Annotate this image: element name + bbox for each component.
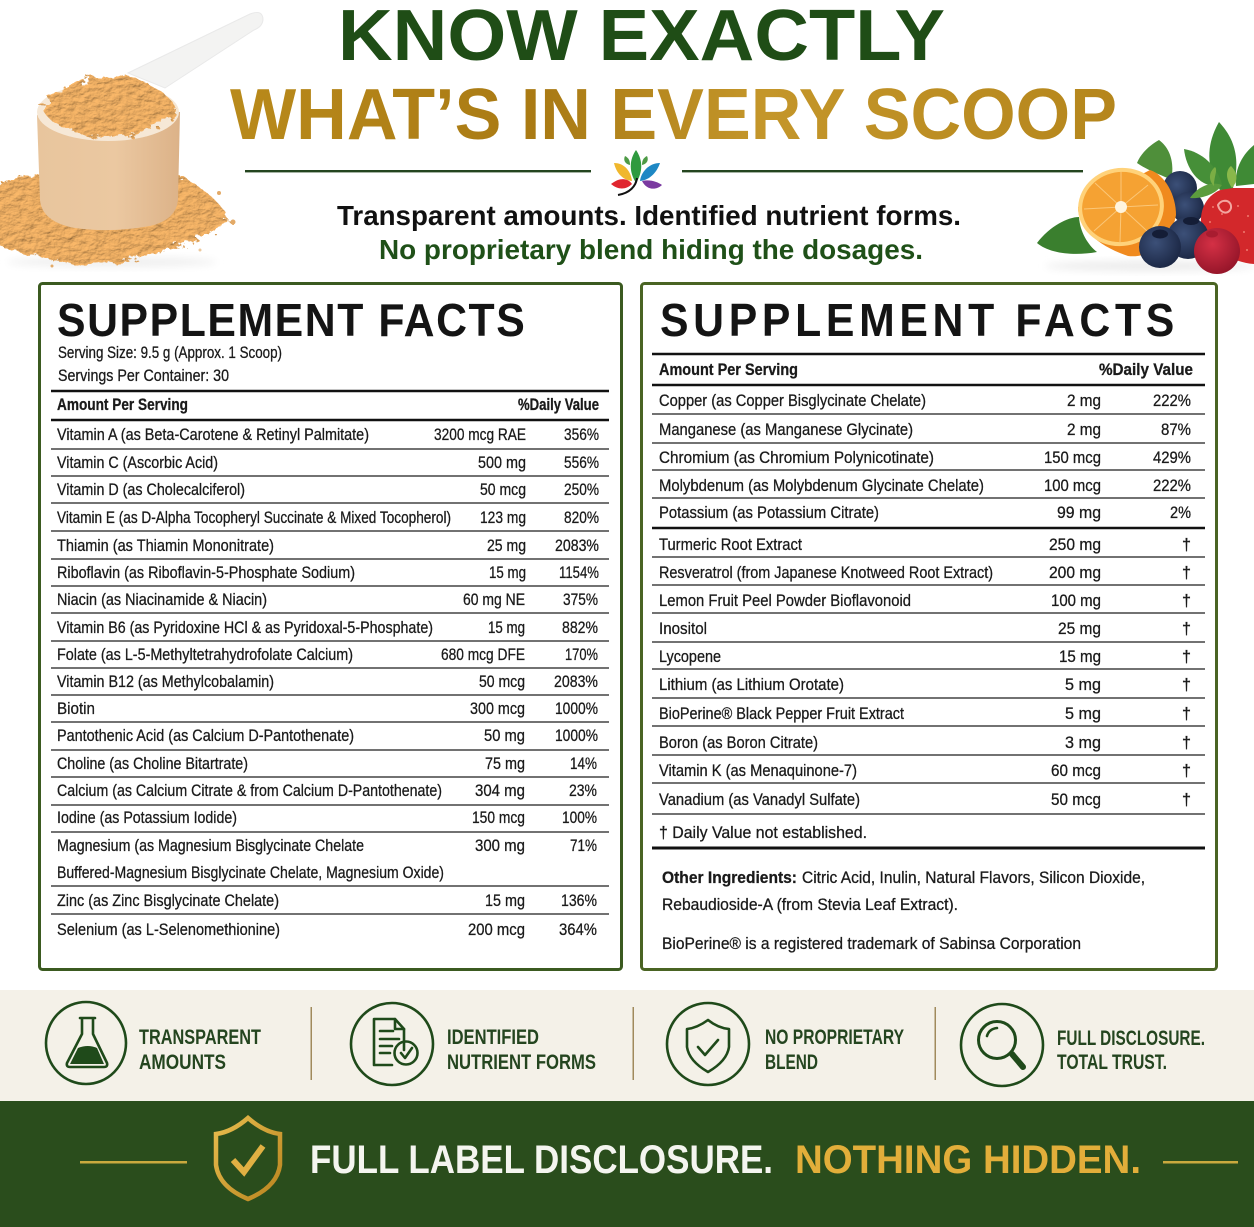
botanical and other ingredient rows: Vitamin K (as Menaquinone-7): [659, 762, 857, 780]
nutrient rows: Folate (as L-5-Methyltetrahydrofolate Calcium): [57, 646, 353, 664]
nutrient rows: 500 mg: [478, 454, 526, 472]
image: fruit cluster: [1037, 122, 1254, 274]
nutrient rows: 820%: [564, 509, 599, 527]
nutrient rows: 150 mcg: [472, 809, 525, 827]
banner text white: FULL LABEL DISCLOSURE.: [310, 1138, 773, 1182]
nutrient rows: 250%: [564, 481, 599, 499]
botanical and other ingredient rows: 200 mg: [1049, 564, 1101, 582]
benefit: transparent amounts: [46, 1002, 261, 1084]
botanical and other ingredient rows: †: [1182, 592, 1191, 610]
nutrient rows: Buffered-Magnesium Bisglycinate Chelate, Magnesium Oxide): [57, 864, 444, 882]
mineral rows: Copper (as Copper Bisglycinate Chelate): [659, 392, 926, 410]
benefit: identified nutrient forms: IDENTIFIED: [447, 1026, 539, 1049]
nutrient rows: 136%: [561, 892, 597, 910]
nutrient rows: 60 mg NE: [463, 591, 525, 609]
table header: Amount Per Serving: [659, 361, 798, 379]
serving information: Servings Per Container: 30: [58, 367, 229, 385]
botanical and other ingredient rows: Resveratrol (from Japanese Knotweed Root Extract): [659, 564, 993, 582]
mineral rows: 100 mcg: [1044, 477, 1101, 495]
mineral rows: Potassium (as Potassium Citrate): [659, 504, 879, 522]
botanical and other ingredient rows: †: [1182, 705, 1191, 723]
nutrient rows: Riboflavin (as Riboflavin-5-Phosphate Sodium): [57, 564, 355, 582]
nutrient rows: 3200 mcg RAE: [434, 426, 526, 444]
nutrient rows: 300 mg: [475, 837, 525, 855]
nutrient rows: Iodine (as Potassium Iodide): [57, 809, 237, 827]
botanical and other ingredient rows: †: [1182, 620, 1191, 638]
nutrient rows: 71%: [570, 837, 597, 855]
benefit: transparent amounts: AMOUNTS: [139, 1051, 226, 1074]
subtitle line 2: No proprietary blend hiding the dosages.: [379, 234, 923, 265]
nutrient rows: 1154%: [559, 564, 599, 582]
mineral rows: 2 mg: [1067, 421, 1101, 439]
image: scoop of powder: [0, 12, 263, 268]
benefit: identified nutrient forms: NUTRIENT FORMS: [447, 1051, 596, 1074]
nutrient rows: 15 mg: [488, 619, 525, 637]
nutrient rows: Thiamin (as Thiamin Mononitrate): [57, 537, 274, 555]
benefit: full disclosure total trust: FULL DISCLOSURE.: [1057, 1027, 1205, 1050]
botanical and other ingredient rows: Lycopene: [659, 648, 721, 666]
table header: [57, 396, 599, 414]
nutrient rows: Vitamin B6 (as Pyridoxine HCl & as Pyridoxal-5-Phosphate): [57, 619, 433, 637]
icon: shield with check: [667, 1003, 749, 1085]
nutrient rows: 15 mg: [485, 892, 525, 910]
nutrient rows: Choline (as Choline Bitartrate): [57, 755, 248, 773]
mineral rows: Manganese (as Manganese Glycinate): [659, 421, 913, 439]
nutrient rows: 14%: [570, 755, 597, 773]
botanical and other ingredient rows: 15 mg: [1059, 648, 1101, 666]
nutrient rows: Pantothenic Acid (as Calcium D-Pantothenate): [57, 727, 354, 745]
botanical and other ingredient rows: 60 mcg: [1051, 762, 1101, 780]
mineral rows: Molybdenum (as Molybdenum Glycinate Chelate): [659, 477, 984, 495]
other ingredients: [662, 869, 1145, 914]
nutrient rows: 23%: [569, 782, 597, 800]
mineral rows: 2%: [1170, 504, 1191, 522]
icon: flask: [46, 1002, 126, 1084]
table header: %Daily Value: [518, 396, 599, 414]
mineral rows: Chromium (as Chromium Polynicotinate): [659, 449, 934, 467]
trademark note: BioPerine® is a registered trademark of Sabinsa Corporation: [662, 935, 1081, 953]
panel: supplement facts right: [642, 284, 1216, 970]
title: [230, 0, 1117, 155]
bottom banner: [0, 1101, 1254, 1227]
nutrient rows: Zinc (as Zinc Bisglycinate Chelate): [57, 892, 279, 910]
nutrient rows: 75 mg: [485, 755, 525, 773]
nutrient rows: Vitamin C (Ascorbic Acid): [57, 454, 218, 472]
botanical and other ingredient rows: Lemon Fruit Peel Powder Bioflavonoid: [659, 592, 911, 610]
botanical and other ingredient rows: BioPerine® Black Pepper Fruit Extract: [659, 705, 904, 723]
botanical and other ingredient rows: 100 mg: [1051, 592, 1101, 610]
botanical and other ingredient rows: Lithium (as Lithium Orotate): [659, 676, 844, 694]
nutrient rows: 50 mg: [484, 727, 525, 745]
other ingredients: Citric Acid, Inulin, Natural Flavors, Silicon Dioxide,: [802, 869, 1145, 887]
benefit: no proprietary blend: NO PROPRIETARY: [765, 1026, 904, 1049]
mineral rows: 222%: [1153, 477, 1191, 495]
icon: magnifying glass: [961, 1004, 1043, 1086]
benefit: identified nutrient forms: [351, 1003, 596, 1085]
nutrient rows: Vitamin A (as Beta-Carotene & Retinyl Palmitate): [57, 426, 369, 444]
other ingredients: Rebaudioside-A (from Stevia Leaf Extract).: [662, 896, 958, 914]
serving information: Serving Size: 9.5 g (Approx. 1 Scoop): [58, 344, 282, 362]
benefit: no proprietary blend: BLEND: [765, 1051, 818, 1074]
banner text gold: NOTHING HIDDEN.: [795, 1138, 1141, 1182]
subtitle line 1: Transparent amounts. Identified nutrient forms.: [337, 200, 961, 231]
benefit: transparent amounts: TRANSPARENT: [139, 1026, 261, 1049]
botanical and other ingredient rows: †: [1182, 648, 1191, 666]
nutrient rows: 300 mcg: [470, 700, 525, 718]
title line 2: WHAT’S IN EVERY SCOOP: [230, 75, 1117, 155]
subtitle: [337, 200, 961, 265]
nutrient rows: 15 mg: [489, 564, 526, 582]
nutrient rows: 25 mg: [487, 537, 526, 555]
mineral rows: 99 mg: [1057, 504, 1101, 522]
nutrient rows: 375%: [563, 591, 598, 609]
nutrient rows: 356%: [564, 426, 599, 444]
mineral rows: 429%: [1153, 449, 1191, 467]
nutrient rows: 556%: [564, 454, 599, 472]
nutrient rows: 364%: [559, 921, 597, 939]
icon: gold shield: [216, 1118, 280, 1199]
panel: supplement facts left: [40, 284, 622, 970]
botanical and other ingredient rows: 3 mg: [1065, 734, 1101, 752]
botanical and other ingredient rows: †: [1182, 791, 1191, 809]
nutrient rows: 170%: [565, 646, 598, 664]
botanical and other ingredient rows: †: [1182, 676, 1191, 694]
divider with lotus icon: [245, 150, 1083, 195]
heading: supplement facts: SUPPLEMENT FACTS: [57, 296, 525, 346]
botanical and other ingredient rows: 5 mg: [1065, 676, 1101, 694]
botanical and other ingredient rows: 250 mg: [1049, 536, 1101, 554]
table header: %Daily Value: [1099, 361, 1193, 379]
benefit: full disclosure total trust: TOTAL TRUST.: [1057, 1051, 1167, 1074]
botanical and other ingredient rows: Vanadium (as Vanadyl Sulfate): [659, 791, 860, 809]
nutrient rows: Vitamin B12 (as Methylcobalamin): [57, 673, 274, 691]
nutrient rows: Niacin (as Niacinamide & Niacin): [57, 591, 267, 609]
nutrient rows: 1000%: [555, 727, 598, 745]
nutrient rows: 50 mcg: [479, 673, 525, 691]
benefit: full disclosure total trust: [961, 1004, 1205, 1086]
botanical and other ingredient rows: Inositol: [659, 620, 707, 638]
nutrient rows: Vitamin E (as D-Alpha Tocopheryl Succinate & Mixed Tocopherol): [57, 509, 451, 527]
mineral rows: 2 mg: [1067, 392, 1101, 410]
benefit strip: [0, 990, 1254, 1101]
heading: supplement facts: SUPPLEMENT FACTS: [660, 296, 1174, 346]
benefit: no proprietary blend: [667, 1003, 904, 1085]
nutrient rows: Vitamin D (as Cholecalciferol): [57, 481, 245, 499]
nutrient rows: 200 mcg: [468, 921, 525, 939]
botanical and other ingredient rows: Turmeric Root Extract: [659, 536, 802, 554]
nutrient rows: 1000%: [555, 700, 598, 718]
botanical and other ingredient rows: 25 mg: [1058, 620, 1101, 638]
botanical and other ingredient rows: †: [1182, 762, 1191, 780]
nutrient rows: 680 mcg DFE: [441, 646, 525, 664]
mineral rows: 87%: [1161, 421, 1191, 439]
nutrient rows: 100%: [562, 809, 597, 827]
mineral rows: [659, 392, 1191, 522]
nutrient rows: 304 mg: [475, 782, 525, 800]
table header: Amount Per Serving: [57, 396, 188, 414]
table header: [659, 361, 1193, 379]
nutrient rows: Magnesium (as Magnesium Bisglycinate Chelate: [57, 837, 364, 855]
nutrient rows: Biotin: [57, 700, 95, 718]
nutrient rows: 2083%: [554, 673, 598, 691]
nutrient rows: 2083%: [555, 537, 599, 555]
nutrient rows: 882%: [562, 619, 598, 637]
nutrient rows: [57, 426, 599, 939]
mineral rows: 150 mcg: [1044, 449, 1101, 467]
botanical and other ingredient rows: †: [1182, 564, 1191, 582]
nutrient rows: 50 mcg: [480, 481, 526, 499]
icon: document with check: [351, 1003, 433, 1085]
footnote: daily value: † Daily Value not established.: [659, 824, 867, 842]
botanical and other ingredient rows: †: [1182, 536, 1191, 554]
mineral rows: 222%: [1153, 392, 1191, 410]
botanical and other ingredient rows: Boron (as Boron Citrate): [659, 734, 818, 752]
botanical and other ingredient rows: †: [1182, 734, 1191, 752]
botanical and other ingredient rows: 50 mcg: [1051, 791, 1101, 809]
other ingredients: Other Ingredients:: [662, 869, 797, 887]
botanical and other ingredient rows: 5 mg: [1065, 705, 1101, 723]
nutrient rows: 123 mg: [480, 509, 526, 527]
botanical and other ingredient rows: [659, 536, 1191, 809]
nutrient rows: Selenium (as L-Selenomethionine): [57, 921, 280, 939]
serving information: [58, 344, 282, 385]
nutrient rows: Calcium (as Calcium Citrate & from Calcium D-Pantothenate): [57, 782, 442, 800]
